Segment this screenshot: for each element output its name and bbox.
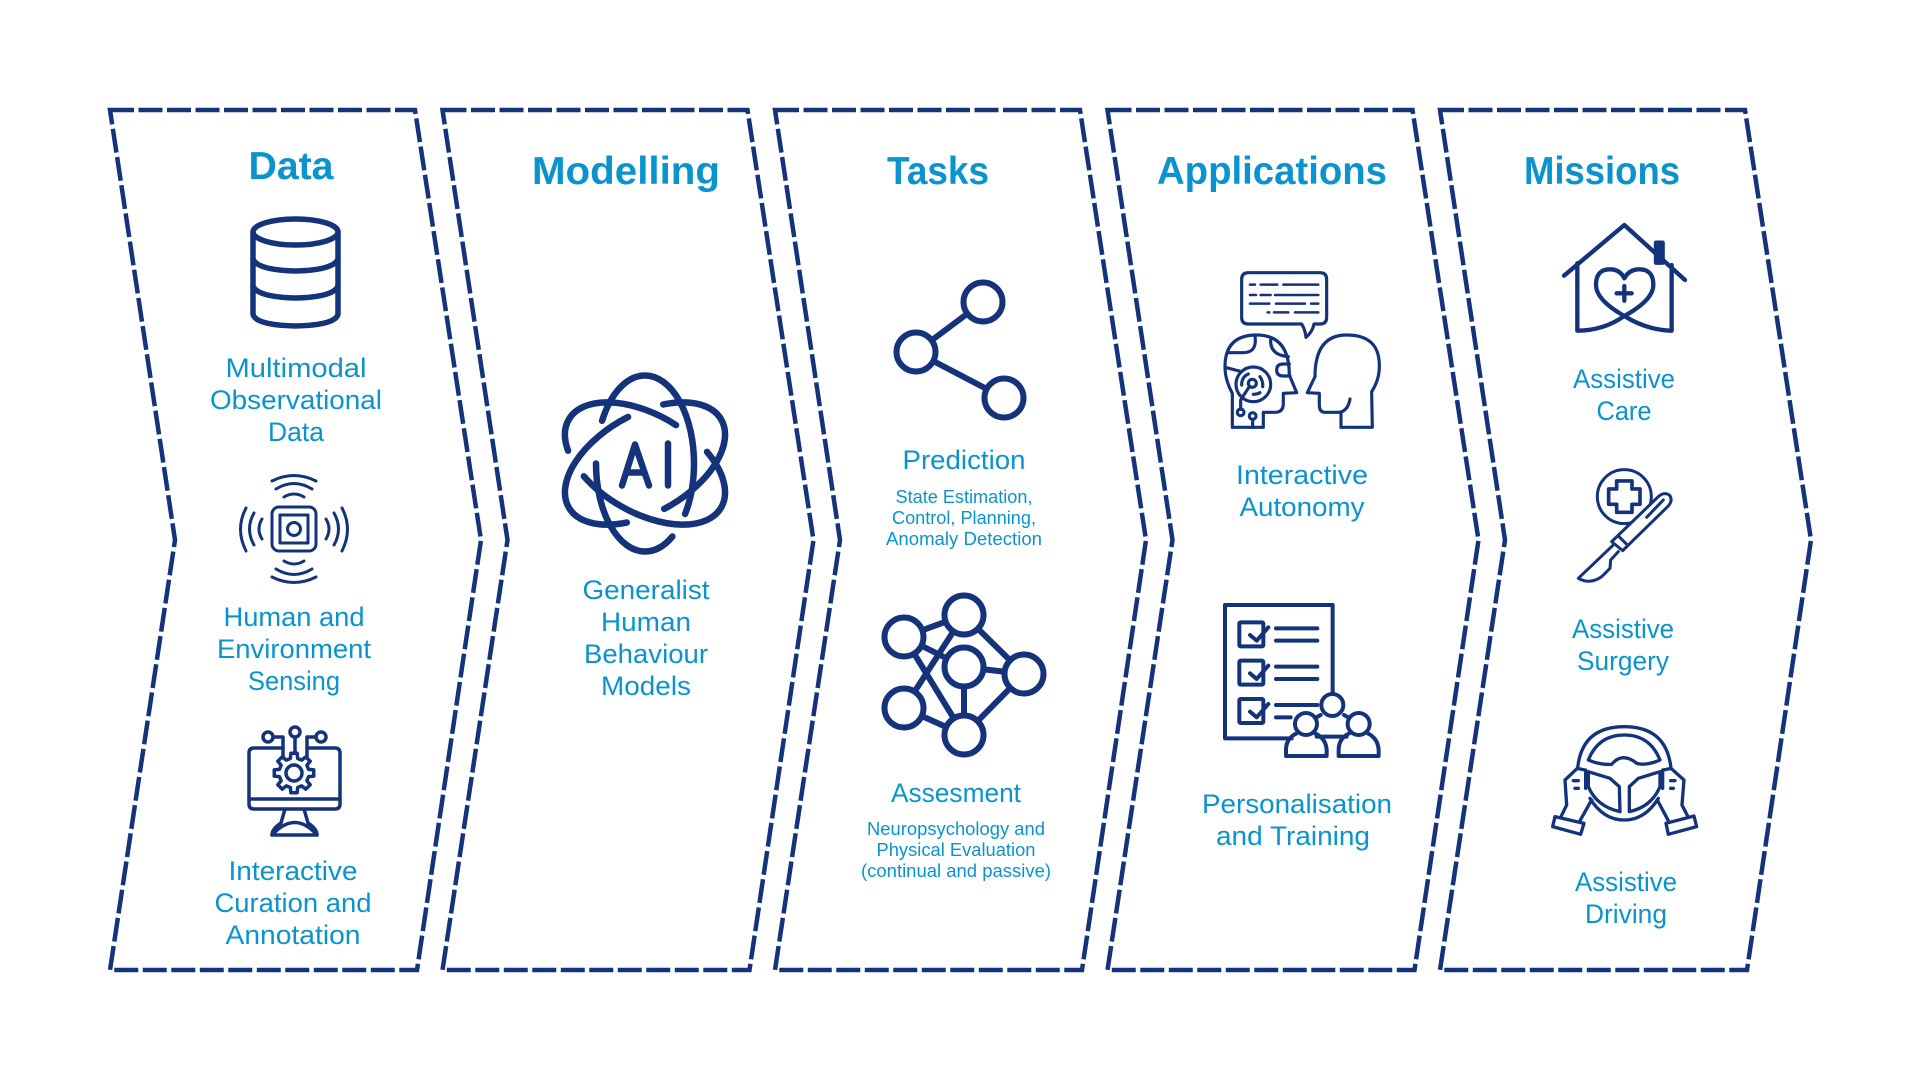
label: assistive care: Care <box>1596 396 1652 426</box>
icon: sensor <box>240 476 348 582</box>
label: generalist human behaviour models: Generalist <box>582 575 710 605</box>
panel: applications <box>1108 110 1478 970</box>
label: assesment: (continual and passive) <box>861 861 1051 881</box>
icon: scalpel and medical cross <box>1578 470 1671 581</box>
label: interactive autonomy <box>1236 460 1368 522</box>
label: generalist human behaviour models: Models <box>601 671 691 701</box>
label: human and environment sensing: Human and <box>224 602 364 632</box>
panel: missions <box>1440 110 1811 970</box>
label: human and environment sensing: Sensing <box>248 666 340 696</box>
label: generalist human behaviour models: Human <box>601 607 691 637</box>
label: assesment <box>861 778 1051 881</box>
panel: data <box>110 110 481 970</box>
label: multimodal observational data: Data <box>268 417 325 447</box>
heading: missions: Missions <box>1524 150 1680 193</box>
icon: hands on steering wheel <box>1553 727 1697 834</box>
label: multimodal observational data <box>210 353 382 447</box>
label: assesment: Physical Evaluation <box>876 840 1036 860</box>
icon: robot and human talking <box>1225 273 1379 427</box>
label: interactive curation and annotation: Annotation <box>226 920 360 950</box>
label: prediction: Prediction <box>902 445 1026 475</box>
label: assesment: Assesment <box>891 778 1021 808</box>
icon: house with heart <box>1564 225 1685 331</box>
label: assesment: Neuropsychology and <box>867 819 1045 839</box>
label: interactive curation and annotation: Interactive <box>228 856 358 886</box>
label: interactive autonomy: Interactive <box>1236 460 1368 490</box>
label: assistive surgery: Surgery <box>1577 646 1669 676</box>
label: interactive curation and annotation <box>214 856 372 950</box>
label: prediction: Control, Planning, <box>892 508 1036 528</box>
label: assistive surgery: Assistive <box>1572 614 1674 644</box>
label: assistive care <box>1573 364 1675 426</box>
label: interactive autonomy: Autonomy <box>1240 492 1365 522</box>
icon: database <box>253 219 338 326</box>
label: assistive surgery <box>1572 614 1674 676</box>
label: human and environment sensing <box>217 602 372 696</box>
heading: tasks: Tasks <box>887 150 989 193</box>
icon: share nodes <box>896 282 1024 418</box>
label: human and environment sensing: Environment <box>217 634 372 664</box>
panel: modelling <box>442 110 814 970</box>
icon: AI atom <box>544 375 746 552</box>
label: personalisation and training: and Training <box>1216 821 1370 851</box>
heading: modelling: Modelling <box>532 150 720 193</box>
label: assistive driving <box>1575 867 1677 929</box>
label: personalisation and training <box>1202 789 1392 851</box>
label: prediction: State Estimation, <box>896 487 1032 507</box>
label: assistive driving: Driving <box>1585 899 1667 929</box>
label: generalist human behaviour models <box>582 575 710 701</box>
heading: data: Data <box>248 145 334 188</box>
label: multimodal observational data: Multimodal <box>226 353 366 383</box>
heading: applications: Applications <box>1157 150 1387 193</box>
label: personalisation and training: Personalisation <box>1202 789 1392 819</box>
panel: tasks <box>775 110 1146 970</box>
label: generalist human behaviour models: Behaviour <box>584 639 708 669</box>
icon: monitor with gear <box>249 727 340 835</box>
label: interactive curation and annotation: Curation and <box>214 888 372 918</box>
label: assistive care: Assistive <box>1573 364 1675 394</box>
label: prediction <box>886 445 1042 549</box>
label: assistive driving: Assistive <box>1575 867 1677 897</box>
icon: checklist and people <box>1225 605 1379 756</box>
label: multimodal observational data: Observational <box>210 385 382 415</box>
icon: neural network <box>884 596 1044 754</box>
label: prediction: Anomaly Detection <box>886 529 1042 549</box>
